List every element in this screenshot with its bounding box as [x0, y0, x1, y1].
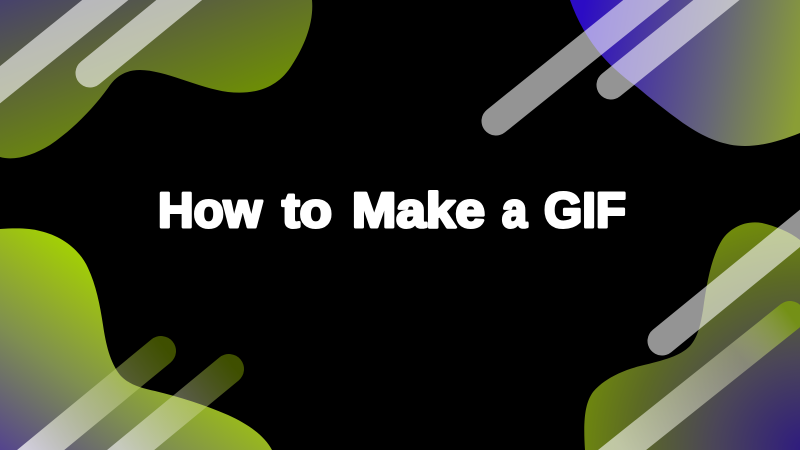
bottom-left decoration [0, 228, 272, 450]
title: GIF [544, 184, 626, 238]
blob: bottom-left [0, 228, 272, 450]
bar: bottom-left short [110, 369, 229, 450]
top-left decoration [0, 0, 312, 158]
title: Make [352, 184, 485, 238]
blob: top-right [570, 0, 800, 146]
bar: bottom-left long [20, 351, 161, 450]
blob: top-left [0, 0, 312, 158]
top-right decoration [496, 0, 800, 146]
bottom-right decoration [584, 212, 800, 450]
bar: bottom-right lower [602, 316, 790, 450]
title: to [282, 184, 332, 238]
bar: top-right short [611, 0, 740, 85]
title: How [158, 184, 263, 238]
blob: bottom-right [584, 222, 800, 450]
bar: top-left short [90, 0, 200, 73]
title: a [502, 184, 528, 238]
bar: top-left long [0, 0, 150, 117]
bar: top-right long [496, 0, 670, 121]
bar: bottom-right upper [662, 212, 800, 341]
